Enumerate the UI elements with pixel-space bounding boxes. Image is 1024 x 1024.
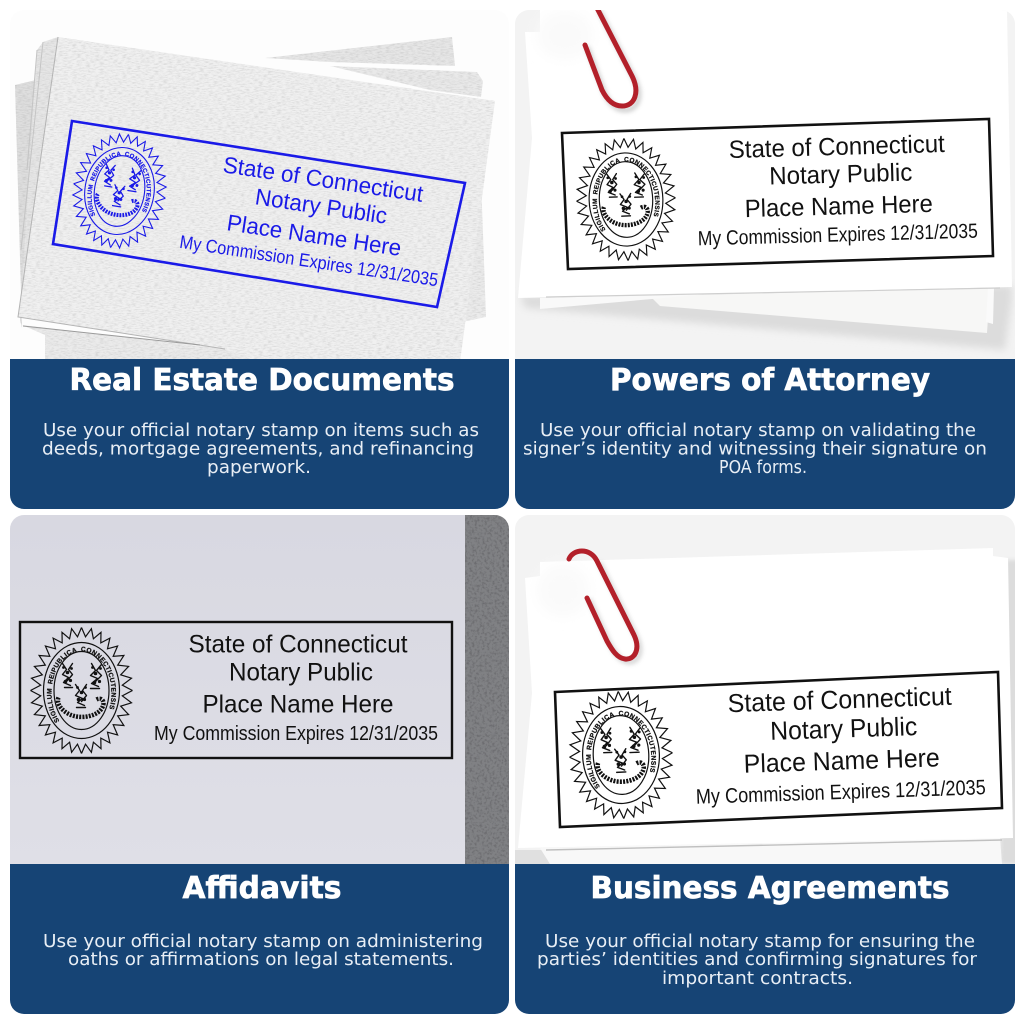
heading: Business Agreements bbox=[590, 871, 950, 906]
description bbox=[43, 932, 483, 970]
seal bbox=[30, 627, 133, 754]
description: signer’s identity and witnessing their signature on bbox=[523, 440, 987, 460]
stamp text: Notary Public bbox=[253, 183, 389, 229]
stamp text: Notary Public bbox=[769, 159, 913, 190]
seal: SIGILLUM REIPUBLICA CONNECTICUTENSIS bbox=[46, 646, 116, 723]
black notary stamp bbox=[554, 670, 1004, 828]
stamp text bbox=[154, 630, 438, 745]
seal bbox=[72, 132, 168, 250]
paper stack bbox=[518, 10, 1012, 350]
description bbox=[523, 421, 987, 478]
photo: black stamp on white cards with paperclip bbox=[515, 515, 1015, 864]
panel: business agreements bbox=[515, 515, 1015, 1014]
stamp text: My Commission Expires 12/31/2035 bbox=[695, 776, 986, 809]
panel: real estate documents bbox=[10, 36, 509, 509]
stamp text bbox=[698, 130, 978, 250]
stamp text: Notary Public bbox=[229, 658, 373, 686]
stamp text: My Commission Expires 12/31/2035 bbox=[178, 231, 440, 290]
heading: Powers of Attorney bbox=[610, 363, 930, 398]
stamp text: State of Connecticut bbox=[728, 130, 945, 164]
blue notary stamp bbox=[52, 120, 466, 308]
heading: Affidavits bbox=[182, 871, 342, 906]
stamp text: Place Name Here bbox=[202, 690, 394, 718]
stamp text: Notary Public bbox=[770, 711, 918, 746]
panel: affidavits bbox=[10, 515, 509, 1014]
seal bbox=[568, 690, 674, 820]
stamp text: Place Name Here bbox=[225, 209, 403, 261]
caption box bbox=[10, 864, 509, 1014]
description: deeds, mortgage agreements, and refinancing bbox=[42, 440, 474, 460]
description: paperwork. bbox=[207, 458, 311, 478]
stamp text: State of Connecticut bbox=[188, 630, 408, 658]
speckled grey edge bbox=[465, 515, 509, 864]
description: Use your official notary stamp on validating the bbox=[540, 421, 976, 441]
black notary stamp bbox=[560, 118, 994, 270]
caption box bbox=[10, 359, 509, 509]
stamp text: State of Connecticut bbox=[727, 681, 953, 718]
caption box bbox=[515, 359, 1015, 509]
black notary stamp bbox=[18, 620, 454, 760]
paper stack bbox=[515, 548, 1020, 864]
description bbox=[42, 421, 479, 478]
seal: SIGILLUM REIPUBLICA CONNECTICUTENSIS bbox=[87, 152, 151, 216]
card edge lines bbox=[18, 37, 225, 349]
caption box bbox=[515, 864, 1015, 1014]
photo: blue stamp on textured cards bbox=[15, 36, 495, 359]
paperclip bbox=[585, 8, 639, 110]
description bbox=[537, 932, 978, 989]
photo: black stamp on lavender paper bbox=[10, 515, 509, 864]
paper stack bbox=[15, 37, 495, 362]
seal: SIGILLUM REIPUBLICA CONNECTICUTENSIS bbox=[592, 156, 660, 232]
stamp text: Place Name Here bbox=[744, 190, 933, 223]
stamp text: Place Name Here bbox=[743, 742, 940, 779]
stamp text: My Commission Expires 12/31/2035 bbox=[698, 220, 978, 250]
photo: black stamp on white cards with paperclip bbox=[515, 10, 1015, 359]
stamp text: My Commission Expires 12/31/2035 bbox=[154, 722, 438, 745]
panel: powers of attorney bbox=[515, 10, 1015, 509]
description: Use your official notary stamp on administering bbox=[43, 932, 483, 952]
paperclip bbox=[569, 551, 640, 662]
description: oaths or affirmations on legal statements. bbox=[68, 950, 454, 970]
description: POA forms. bbox=[719, 458, 807, 478]
description: Use your official notary stamp for ensuring the bbox=[545, 932, 975, 952]
seal bbox=[576, 138, 676, 261]
stamp text: State of Connecticut bbox=[221, 151, 426, 207]
stamp text bbox=[178, 151, 440, 290]
description: parties’ identities and confirming signatures for bbox=[537, 950, 978, 970]
description: important contracts. bbox=[662, 969, 853, 989]
stamp text bbox=[695, 681, 986, 809]
heading: Real Estate Documents bbox=[70, 363, 454, 398]
seal: SIGILLUM REIPUBLICA CONNECTICUTENSIS bbox=[586, 710, 656, 789]
description: Use your official notary stamp on items such as bbox=[43, 421, 479, 441]
